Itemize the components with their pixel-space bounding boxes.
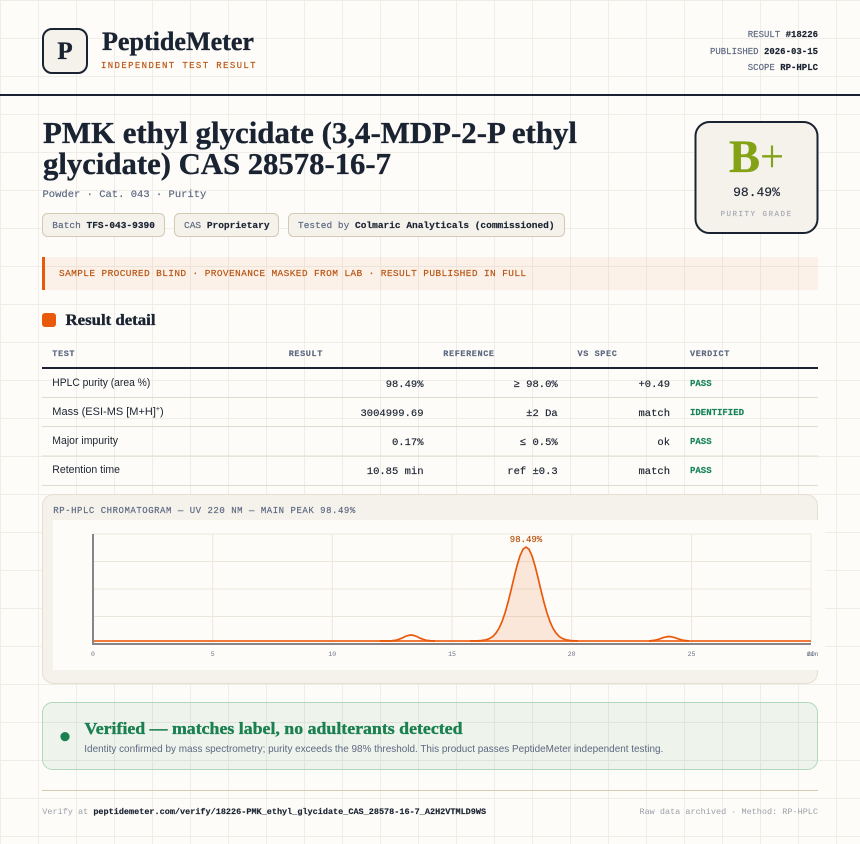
result metadata: PUBLISHED 2026-03-15 bbox=[710, 47, 818, 57]
product title bbox=[43, 115, 577, 181]
header bbox=[0, 27, 860, 96]
row: mass: + bbox=[156, 406, 160, 413]
x axis ticks bbox=[91, 651, 818, 658]
x axis ticks: min bbox=[807, 651, 818, 658]
row: major impurity bbox=[42, 435, 818, 456]
chip: CAS: CAS Proprietary bbox=[184, 220, 270, 231]
product title: PMK ethyl glycidate (3,4-MDP-2-P ethyl bbox=[43, 115, 577, 150]
row: mass: ) bbox=[160, 406, 164, 418]
row: major impurity: ≤ 0.5% bbox=[520, 437, 558, 449]
tagline: INDEPENDENT TEST RESULT bbox=[101, 61, 257, 71]
result table bbox=[42, 349, 818, 486]
product title: glycidate) CAS 28578-16-7 bbox=[43, 146, 391, 181]
row: mass: match bbox=[638, 408, 670, 420]
chip: CAS bbox=[174, 214, 278, 236]
result metadata: SCOPE RP-HPLC bbox=[748, 63, 819, 73]
grade letter bbox=[729, 131, 784, 183]
row: HPLC purity bbox=[42, 377, 818, 398]
row: mass bbox=[42, 406, 818, 427]
x axis ticks: 5 bbox=[211, 651, 215, 658]
row: mass: Mass (ESI-MS [M+H] bbox=[52, 406, 156, 418]
chromatogram panel bbox=[42, 494, 825, 684]
notice banner bbox=[42, 257, 818, 290]
row: HPLC purity: HPLC purity (area %) bbox=[52, 377, 150, 389]
verification callout bbox=[42, 702, 818, 770]
result metadata: RESULT #18226 bbox=[748, 30, 818, 40]
trace line bbox=[380, 547, 689, 641]
logo mark: P bbox=[57, 38, 73, 65]
axes bbox=[92, 534, 811, 645]
verify link: Verify at peptidemeter.com/verify/18226-PMK_ethyl_glycidate_CAS_28578-16-7_A2H2VTMLD9WS bbox=[42, 807, 486, 817]
chip: batch bbox=[42, 214, 164, 236]
chip: tested by bbox=[288, 214, 564, 236]
row: mass: 3004999.69 bbox=[360, 408, 424, 420]
table header: REFERENCE bbox=[443, 349, 495, 359]
x axis ticks: 25 bbox=[688, 651, 695, 658]
footer note: Raw data archived · Method: RP-HPLC bbox=[639, 807, 818, 817]
logo mark bbox=[43, 29, 87, 73]
result metadata bbox=[710, 30, 819, 73]
row: mass: IDENTIFIED bbox=[690, 408, 745, 418]
row: major impurity: 0.17% bbox=[392, 437, 424, 449]
brand name: PeptideMeter bbox=[102, 27, 254, 56]
table header bbox=[42, 349, 818, 369]
row: HPLC purity: 98.49% bbox=[386, 379, 424, 391]
row: major impurity: Major impurity bbox=[52, 435, 118, 447]
baseline bbox=[94, 640, 811, 642]
grade letter: + bbox=[760, 131, 784, 183]
row: major impurity: PASS bbox=[690, 437, 712, 447]
row: mass: ±2 Da bbox=[526, 408, 558, 420]
callout heading: Verified — matches label, no adulterants detected bbox=[84, 719, 463, 738]
row: HPLC purity: ≥ 98.0% bbox=[514, 379, 558, 391]
chip: tested by: Tested by Colmaric Analyticals (commissioned) bbox=[298, 220, 555, 231]
chart caption: RP-HPLC CHROMATOGRAM — UV 220 NM — MAIN PEAK 98.49% bbox=[53, 506, 356, 516]
table header: RESULT bbox=[289, 349, 323, 359]
grade percentage: 98.49% bbox=[733, 185, 780, 200]
grade letter: B bbox=[729, 131, 760, 183]
section heading: Result detail bbox=[66, 312, 156, 329]
peak fill bbox=[474, 547, 578, 641]
notice banner: SAMPLE PROCURED BLIND · PROVENANCE MASKED FROM LAB · RESULT PUBLISHED IN FULL bbox=[59, 268, 526, 279]
status dot bbox=[60, 732, 70, 741]
chips bbox=[42, 214, 564, 236]
x axis ticks: 20 bbox=[568, 651, 576, 658]
table header: TEST bbox=[52, 349, 75, 359]
peak label: 98.49% bbox=[510, 535, 543, 545]
row: retention time: Retention time bbox=[52, 464, 120, 476]
row: retention time: ref ±0.3 bbox=[507, 466, 558, 478]
callout body: Identity confirmed by mass spectrometry; purity exceeds the 98% threshold. This product passes PeptideMeter independent testing. bbox=[84, 743, 663, 755]
table header: VERDICT bbox=[690, 349, 730, 359]
row: HPLC purity: +0.49 bbox=[638, 379, 670, 391]
grade caption: PURITY GRADE bbox=[720, 211, 793, 219]
x axis ticks: 15 bbox=[448, 651, 456, 658]
footer bbox=[42, 790, 818, 817]
x axis ticks: 0 bbox=[91, 651, 95, 658]
row: retention time bbox=[42, 464, 818, 486]
row: major impurity: ok bbox=[657, 437, 670, 449]
x axis ticks: 30 bbox=[807, 651, 815, 658]
product subtitle: Powder · Cat. 043 · Purity bbox=[42, 189, 206, 201]
x axis ticks: 10 bbox=[328, 651, 336, 658]
chromatogram chart bbox=[53, 520, 825, 670]
row: retention time: match bbox=[638, 466, 670, 478]
grade card bbox=[696, 122, 818, 233]
row: HPLC purity: PASS bbox=[690, 379, 712, 389]
row: retention time: PASS bbox=[690, 466, 712, 476]
table header: VS SPEC bbox=[578, 349, 617, 359]
row: retention time: 10.85 min bbox=[367, 466, 424, 478]
header rule bbox=[0, 94, 860, 96]
chip: batch: Batch TFS-043-9390 bbox=[52, 220, 155, 231]
